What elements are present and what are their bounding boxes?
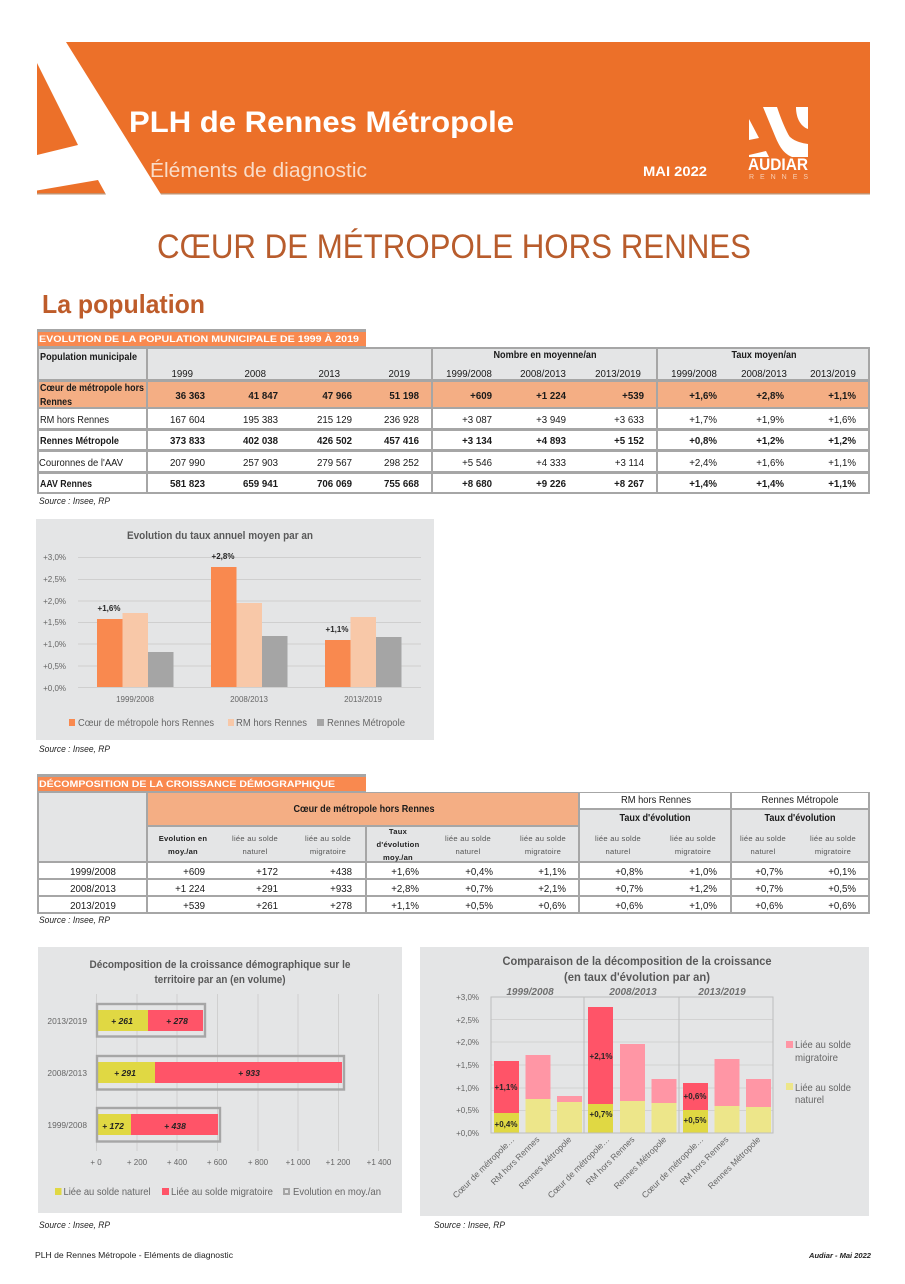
date: MAI 2022 [643, 163, 707, 179]
y axis labels: +1,0% [456, 1084, 479, 1093]
column sub-headers: migratoire [815, 847, 851, 856]
data labels [98, 552, 348, 634]
row: Couronnes de l'AAV: 279 567 [317, 458, 352, 469]
bar labels: + 278 [166, 1016, 188, 1026]
logo: Audiar [748, 107, 808, 181]
row: 1999/2008: +0,1% [828, 867, 856, 878]
row: 2008/2013: +0,7% [615, 884, 643, 895]
group headers: Taux d'évolution [764, 813, 836, 824]
group headers [294, 795, 838, 824]
row: 1999/2008 [70, 867, 856, 878]
row: Cœur de métropole hors Rennes: +609 [470, 391, 493, 402]
row: Couronnes de l'AAV: 207 990 [170, 458, 206, 469]
table header row: 2019 [388, 369, 410, 380]
y axis labels: +3,0% [43, 553, 66, 562]
row: 2013/2019: +0,5% [465, 901, 493, 912]
legend [69, 718, 405, 729]
row: 2013/2019: +1,1% [391, 901, 419, 912]
row: 1999/2008: +609 [183, 867, 205, 878]
period headers: 2008/2013 [608, 987, 657, 998]
column sub-headers: Taux [389, 827, 408, 836]
row: Rennes Métropole: 426 502 [317, 436, 352, 447]
row: Couronnes de l'AAV: +1,1% [828, 458, 856, 469]
row: AAV Rennes: 581 823 [170, 479, 206, 490]
column sub-headers: liée au solde [670, 834, 716, 843]
table header row: 2013/2019 [810, 369, 856, 380]
table banner: decomposition [37, 774, 366, 792]
column sub-headers [159, 827, 856, 862]
row: 2008/2013: +933 [330, 884, 352, 895]
category labels: 2013/2019 [47, 1016, 87, 1026]
y axis labels: +1,5% [456, 1061, 479, 1070]
header subtitle: Éléments de diagnostic [150, 159, 367, 182]
category labels: 2008/2013 [47, 1068, 87, 1078]
table header row: 1999/2008 [671, 369, 717, 380]
row: 1999/2008: +438 [330, 867, 352, 878]
data labels: +1,6% [98, 604, 120, 613]
source: chart 2: Source : Insee, RP [39, 1220, 110, 1230]
rotated category labels: RM hors Rennes [678, 1134, 730, 1187]
row: Cœur de métropole hors Rennes: 51 198 [389, 391, 420, 402]
chart title: Décomposition de la croissance démographique sur le [90, 959, 350, 971]
x axis labels [116, 695, 382, 704]
table header row: 2008/2013 [741, 369, 787, 380]
row: 2013/2019: 2013/2019 [70, 901, 116, 912]
legend: Evolution en moy./an [293, 1187, 381, 1198]
row: Couronnes de l'AAV: +1,6% [756, 458, 784, 469]
group headers: RM hors Rennes [621, 795, 691, 806]
y axis labels: +2,0% [43, 597, 66, 606]
column sub-headers: naturel [456, 847, 481, 856]
row: 2013/2019 [70, 901, 856, 912]
row: 1999/2008: +1,0% [689, 867, 717, 878]
column sub-headers: liée au solde [445, 834, 491, 843]
row: 1999/2008: 1999/2008 [70, 867, 116, 878]
legend [55, 1187, 381, 1198]
row: 1999/2008: +1,1% [538, 867, 566, 878]
row: Cœur de métropole hors Rennes: +1,6% [689, 391, 717, 402]
row: RM hors Rennes: +3 949 [536, 415, 566, 426]
logo: Audiar: AUDIAR [748, 156, 808, 174]
row: 1999/2008: +172 [256, 867, 278, 878]
row: 1999/2008: +0,7% [755, 867, 783, 878]
row: 1999/2008: +0,4% [465, 867, 493, 878]
category labels [47, 1016, 87, 1130]
row: Cœur de métropole hors Rennes: 41 847 [248, 391, 278, 402]
x axis labels: + 400 [167, 1158, 188, 1167]
row: RM hors Rennes: +1,6% [828, 415, 856, 426]
panel: horizontal stacked bar chart [38, 947, 402, 1213]
x axis labels: +1 200 [326, 1158, 351, 1167]
x axis labels: +1 000 [286, 1158, 311, 1167]
y axis labels: +0,5% [456, 1106, 479, 1115]
row: Rennes Métropole: +1,2% [756, 436, 784, 447]
row: Cœur de métropole hors Rennes: Cœur de métropole hors [40, 383, 144, 394]
column sub-headers: migratoire [675, 847, 711, 856]
column sub-headers: migratoire [525, 847, 561, 856]
y axis labels: +2,0% [456, 1038, 479, 1047]
row: 2013/2019: +278 [330, 901, 352, 912]
row: Rennes Métropole: +3 134 [462, 436, 493, 447]
bar labels: + 438 [164, 1121, 186, 1131]
row: 2008/2013: +0,5% [828, 884, 856, 895]
x axis labels [90, 1158, 392, 1167]
row: 2008/2013 [70, 884, 856, 895]
table header row: 2013/2019 [595, 369, 641, 380]
y axis labels: +1,5% [43, 618, 66, 627]
table banner: evolution [37, 329, 366, 347]
table header row: 2008 [244, 369, 266, 380]
row: AAV Rennes: +1,4% [689, 479, 717, 490]
bar labels: + 172 [102, 1121, 124, 1131]
y axis labels: +1,0% [43, 640, 66, 649]
row: Couronnes de l'AAV: 257 903 [243, 458, 278, 469]
data labels: +1,1% [326, 625, 348, 634]
table: population municipale [37, 347, 870, 494]
y axis labels: +2,5% [43, 575, 66, 584]
source: chart 1: Source : Insee, RP [39, 744, 110, 754]
column sub-headers: liée au solde [232, 834, 278, 843]
row: Rennes Métropole: 402 038 [243, 436, 279, 447]
table header row: 2013 [318, 369, 340, 380]
stacked bars [97, 1004, 344, 1142]
bar labels: + 291 [114, 1068, 136, 1078]
row: Rennes Métropole: +0,8% [689, 436, 717, 447]
rotated category labels: Cœur de métropole… [451, 1134, 516, 1200]
section heading: La population [42, 289, 205, 319]
row: AAV Rennes: 755 668 [384, 479, 420, 490]
row: RM hors Rennes [40, 415, 856, 426]
row: Cœur de métropole hors Rennes: Rennes [40, 397, 72, 408]
x axis labels: 2008/2013 [230, 695, 268, 704]
table header row: Nombre en moyenne/an [494, 350, 597, 361]
column sub-headers: liée au solde [740, 834, 786, 843]
row: 1999/2008: +1,6% [391, 867, 419, 878]
legend: Rennes Métropole [327, 718, 405, 729]
row: Couronnes de l'AAV: +5 546 [462, 458, 492, 469]
table header row: Taux moyen/an [732, 350, 797, 361]
row: AAV Rennes: +1,4% [756, 479, 784, 490]
row: Couronnes de l'AAV: +4 333 [536, 458, 566, 469]
row: AAV Rennes: +8 680 [462, 479, 492, 490]
header banner [37, 42, 870, 194]
column sub-headers: Evolution en [159, 834, 207, 843]
column sub-headers: liée au solde [305, 834, 351, 843]
table header row: 1999 [171, 369, 193, 380]
data labels: +0,6% [684, 1092, 706, 1101]
rotated category labels: Cœur de métropole… [640, 1134, 705, 1200]
row: AAV Rennes: 706 069 [317, 479, 353, 490]
period headers: 2013/2019 [697, 987, 746, 998]
x axis labels: 2013/2019 [344, 695, 382, 704]
row: 2013/2019: +0,6% [615, 901, 643, 912]
data labels: +0,4% [495, 1120, 517, 1129]
row: Cœur de métropole hors Rennes: 47 966 [322, 391, 353, 402]
row: 2013/2019: +0,6% [828, 901, 856, 912]
legend: naturel [795, 1095, 824, 1106]
row: AAV Rennes: AAV Rennes [40, 479, 92, 490]
rotated category labels: RM hors Rennes [584, 1134, 636, 1187]
legend: migratoire [795, 1053, 838, 1064]
legend: Liée au solde [795, 1040, 851, 1051]
row: Cœur de métropole hors Rennes: +539 [622, 391, 645, 402]
row: Rennes Métropole: 457 416 [384, 436, 420, 447]
y axis labels [43, 553, 66, 693]
period headers: 1999/2008 [506, 987, 554, 998]
column sub-headers: liée au solde [520, 834, 566, 843]
row: Couronnes de l'AAV: 298 252 [384, 458, 419, 469]
row: Rennes Métropole: 373 833 [170, 436, 206, 447]
icon: white A shape [37, 42, 161, 194]
page title: CŒUR DE MÉTROPOLE HORS RENNES [157, 228, 751, 266]
x axis labels: +1 400 [367, 1158, 392, 1167]
y axis labels: +0,5% [43, 662, 66, 671]
bar labels: + 261 [111, 1016, 133, 1026]
column sub-headers: d'évolution [377, 840, 420, 849]
source: table 1: Source : Insee, RP [39, 496, 110, 506]
rotated category labels: Rennes Métropole [517, 1134, 574, 1191]
table banner: evolution: EVOLUTION DE LA POPULATION MUNICIPALE DE 1999 À 2019 [39, 334, 359, 345]
row: Cœur de métropole hors Rennes: +2,8% [756, 391, 784, 402]
chart title: Comparaison de la décomposition de la croissance [502, 954, 772, 968]
row: 2008/2013: +2,1% [538, 884, 566, 895]
x axis labels: + 0 [90, 1158, 102, 1167]
y axis labels [456, 993, 479, 1138]
chart title: territoire par an (en volume) [154, 974, 286, 986]
row: 2013/2019: +539 [183, 901, 205, 912]
row: Couronnes de l'AAV: +2,4% [689, 458, 717, 469]
table banner: decomposition: DÉCOMPOSITION DE LA CROISSANCE DÉMOGRAPHIQUE [39, 779, 335, 790]
row: 2008/2013: +0,7% [755, 884, 783, 895]
group headers: Taux d'évolution [620, 813, 691, 824]
group headers: Rennes Métropole [762, 795, 838, 806]
row: RM hors Rennes: 167 604 [170, 415, 206, 426]
row: 2008/2013: +2,8% [391, 884, 419, 895]
column sub-headers: naturel [606, 847, 631, 856]
data labels: +0,5% [684, 1116, 706, 1125]
row: 2013/2019: +261 [256, 901, 278, 912]
legend: RM hors Rennes [236, 718, 307, 729]
bar labels [102, 1016, 260, 1131]
bar labels: + 933 [238, 1068, 260, 1078]
table header row [40, 350, 856, 380]
period headers [506, 987, 746, 998]
rotated category labels: Rennes Métropole [706, 1134, 763, 1191]
rotated category labels: Cœur de métropole… [546, 1134, 611, 1200]
legend: Cœur de métropole hors Rennes [78, 718, 214, 729]
row: RM hors Rennes: +1,9% [756, 415, 784, 426]
row: AAV Rennes: +1,1% [828, 479, 856, 490]
rotated category labels: Rennes Métropole [612, 1134, 669, 1191]
row: Couronnes de l'AAV [39, 458, 856, 469]
row: Couronnes de l'AAV: Couronnes de l'AAV [39, 458, 124, 469]
row: AAV Rennes: 659 941 [243, 479, 279, 490]
row: Cœur de métropole hors Rennes: +1 224 [536, 391, 567, 402]
header title: PLH de Rennes Métropole [129, 106, 514, 139]
stacked columns [494, 1007, 771, 1133]
data labels [495, 1052, 706, 1129]
table header row: 1999/2008 [446, 369, 492, 380]
column sub-headers: liée au solde [595, 834, 641, 843]
footer left: PLH de Rennes Métropole - Eléments de diagnostic [35, 1250, 234, 1260]
chart title: Evolution du taux annuel moyen par an [127, 530, 313, 542]
row: Couronnes de l'AAV: +3 114 [615, 458, 645, 469]
legend [786, 1040, 851, 1106]
row: AAV Rennes: +9 226 [536, 479, 567, 490]
data labels: +0,7% [590, 1110, 612, 1119]
y axis labels: +3,0% [456, 993, 479, 1002]
row: RM hors Rennes: RM hors Rennes [40, 415, 109, 426]
panel: stacked column comparison chart [420, 947, 869, 1216]
row: RM hors Rennes: 215 129 [317, 415, 352, 426]
row: Rennes Métropole: Rennes Métropole [40, 436, 120, 447]
footer right: Audiar - Mai 2022 [808, 1253, 871, 1260]
row: Cœur de métropole hors Rennes: +1,1% [828, 391, 856, 402]
row: AAV Rennes [40, 479, 856, 490]
rotated category labels [451, 1134, 763, 1200]
chart title [90, 959, 350, 986]
x axis labels: + 800 [248, 1158, 269, 1167]
data labels: +1,1% [495, 1083, 517, 1092]
table header row: Population municipale [40, 352, 138, 363]
y axis labels: +0,0% [43, 684, 66, 693]
row: RM hors Rennes: +1,7% [689, 415, 717, 426]
chart title: (en taux d'évolution par an) [564, 970, 710, 984]
y axis labels: +2,5% [456, 1016, 479, 1025]
row: 1999/2008: +0,8% [615, 867, 643, 878]
x axis labels: + 600 [207, 1158, 228, 1167]
column sub-headers: naturel [243, 847, 268, 856]
row: Cœur de métropole hors Rennes [40, 383, 856, 408]
column sub-headers: migratoire [310, 847, 346, 856]
y axis labels: +0,0% [456, 1129, 479, 1138]
row: Rennes Métropole: +1,2% [828, 436, 856, 447]
chart title [502, 954, 772, 984]
row: RM hors Rennes: 195 383 [243, 415, 278, 426]
column sub-headers: liée au solde [810, 834, 856, 843]
bars [97, 567, 402, 687]
logo: Audiar: RENNES [749, 174, 808, 181]
row: 2008/2013: +291 [256, 884, 278, 895]
row: 2013/2019: +0,6% [538, 901, 566, 912]
legend: Liée au solde naturel [64, 1187, 150, 1198]
column sub-headers: moy./an [383, 853, 413, 862]
source: chart 3: Source : Insee, RP [434, 1220, 505, 1230]
row: Rennes Métropole [40, 436, 856, 447]
row: 2008/2013: 2008/2013 [70, 884, 116, 895]
row: Rennes Métropole: +4 893 [536, 436, 567, 447]
group headers: Cœur de métropole hors Rennes [294, 804, 434, 815]
column sub-headers: naturel [751, 847, 776, 856]
rotated category labels: RM hors Rennes [489, 1134, 541, 1187]
column sub-headers: moy./an [168, 847, 198, 856]
row: 2008/2013: +0,7% [465, 884, 493, 895]
data labels: +2,8% [212, 552, 234, 561]
row: AAV Rennes: +8 267 [614, 479, 644, 490]
table: decomposition de la croissance [37, 792, 870, 914]
row: 2013/2019: +0,6% [755, 901, 783, 912]
row: Cœur de métropole hors Rennes: 36 363 [175, 391, 206, 402]
row: 2013/2019: +1,0% [689, 901, 717, 912]
row: 2008/2013: +1 224 [175, 884, 206, 895]
row: RM hors Rennes: +3 087 [462, 415, 492, 426]
category labels: 1999/2008 [47, 1120, 87, 1130]
source: table 2: Source : Insee, RP [39, 915, 110, 925]
legend: Liée au solde [795, 1083, 851, 1094]
data labels: +2,1% [590, 1052, 612, 1061]
x axis labels: 1999/2008 [116, 695, 154, 704]
x axis labels: + 200 [127, 1158, 148, 1167]
panel: bar chart evolution du taux annuel [36, 519, 434, 740]
table header row: 2008/2013 [520, 369, 566, 380]
row: RM hors Rennes: 236 928 [384, 415, 419, 426]
row: RM hors Rennes: +3 633 [614, 415, 644, 426]
row: 2008/2013: +1,2% [689, 884, 717, 895]
legend: Liée au solde migratoire [171, 1187, 273, 1198]
row: Rennes Métropole: +5 152 [614, 436, 644, 447]
